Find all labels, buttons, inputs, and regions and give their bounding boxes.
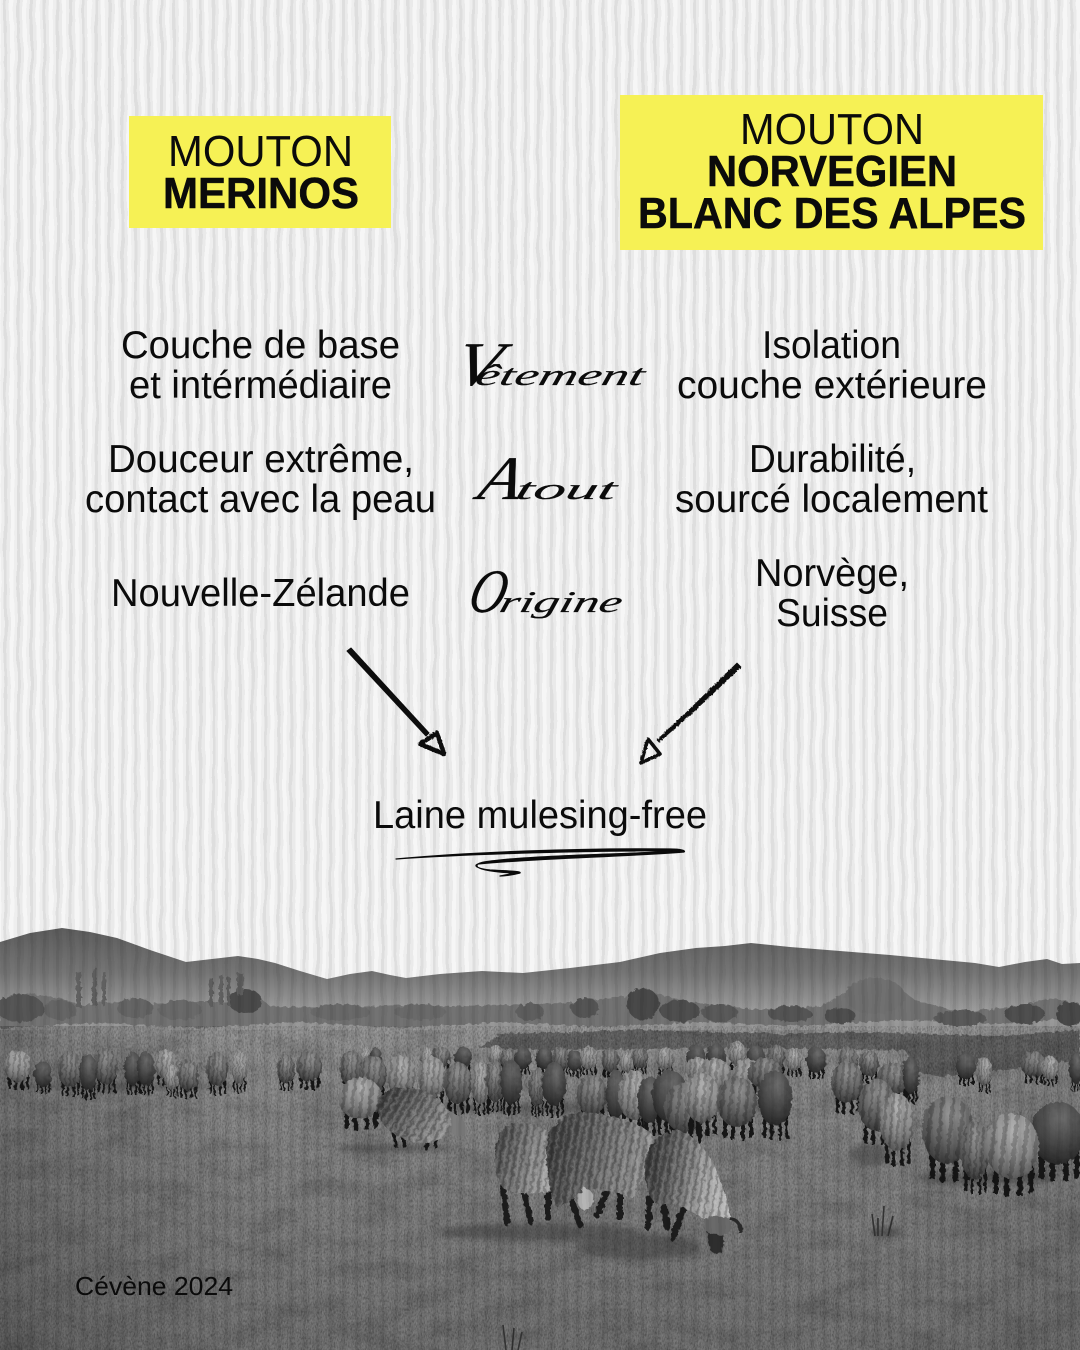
right sheep legs: [648, 1198, 684, 1238]
merinos strength: Douceur extrême,: [108, 438, 414, 481]
legs: [503, 1185, 620, 1225]
merinos clothing layer: et intérmédiaire: [129, 364, 392, 407]
norvegien origin: Suisse: [776, 592, 888, 635]
merinos strength: contact avec la peau: [85, 478, 436, 521]
script label: origine: rigine: [496, 585, 627, 619]
badge: mouton merinos: MERINOS: [163, 169, 359, 218]
badge: mouton norvegien blanc des alpes: MOUTON: [740, 105, 924, 154]
left sheep: [495, 1123, 556, 1194]
badge: mouton merinos: [129, 116, 391, 228]
merinos origin: Nouvelle-Zélande: [111, 572, 410, 615]
badge: mouton merinos: MOUTON: [168, 127, 353, 176]
meadow: [0, 1012, 1080, 1350]
badge: mouton norvegien blanc des alpes: [620, 95, 1043, 250]
back row of sheep: [360, 1041, 919, 1103]
meadow mottling: [0, 1030, 1080, 1350]
norvegien strength: sourcé localement: [675, 478, 988, 521]
norvegien clothing layer: couche extérieure: [677, 364, 987, 407]
norvegien origin: [755, 552, 909, 635]
script label: atout: tout: [512, 472, 624, 506]
right group of sheep: [858, 1079, 1080, 1196]
row: vêtement: [121, 324, 987, 407]
right sheep: [645, 1130, 730, 1222]
row: atout: [85, 438, 988, 521]
merinos clothing layer: Couche de base: [121, 324, 400, 367]
script label: vêtement: V: [449, 330, 517, 399]
hand-drawn underline: [396, 849, 684, 876]
script label: origine: O: [463, 557, 516, 626]
middle sheep: [546, 1112, 654, 1207]
right sheep head: [704, 1216, 732, 1254]
photo: flock of sheep grazing in a field below mountains: [0, 928, 1080, 1350]
norvegien clothing layer: Isolation: [762, 324, 901, 367]
merinos strength: [85, 438, 436, 521]
conclusion text: Laine mulesing-free: [373, 794, 707, 837]
norvegien clothing layer: [677, 324, 987, 407]
script label: atout: A: [468, 444, 532, 513]
norvegien strength: Durabilité,: [749, 438, 916, 481]
script label: vêtement: êtement: [472, 358, 651, 392]
arrow: norvegien to conclusion: [641, 663, 741, 763]
badge: mouton norvegien blanc des alpes: NORVEGIEN: [707, 147, 957, 196]
left group of sheep: [4, 1048, 322, 1100]
ground shadows: [20, 1083, 1055, 1260]
dark reeds: [478, 1030, 1080, 1077]
row: origine: [111, 552, 909, 635]
credit: Cévène 2024: [75, 1271, 233, 1301]
norvegien origin: Norvège,: [755, 552, 909, 595]
middle flock of sheep: [340, 1050, 1080, 1146]
white lamb patch: [577, 1188, 593, 1210]
grass tufts: [503, 1206, 893, 1350]
three large sheep in the foreground: [495, 1112, 741, 1254]
merinos clothing layer: [121, 324, 400, 407]
badge: mouton norvegien blanc des alpes: BLANC DES ALPES: [638, 189, 1026, 238]
arrow: merinos to conclusion: [347, 648, 444, 754]
tree line: [0, 968, 1080, 1028]
sheep in left-centre foreground: [338, 1077, 469, 1152]
right sheep horn: [730, 1219, 741, 1234]
norvegien strength: [675, 438, 988, 521]
distant mountains: [0, 928, 1080, 1012]
